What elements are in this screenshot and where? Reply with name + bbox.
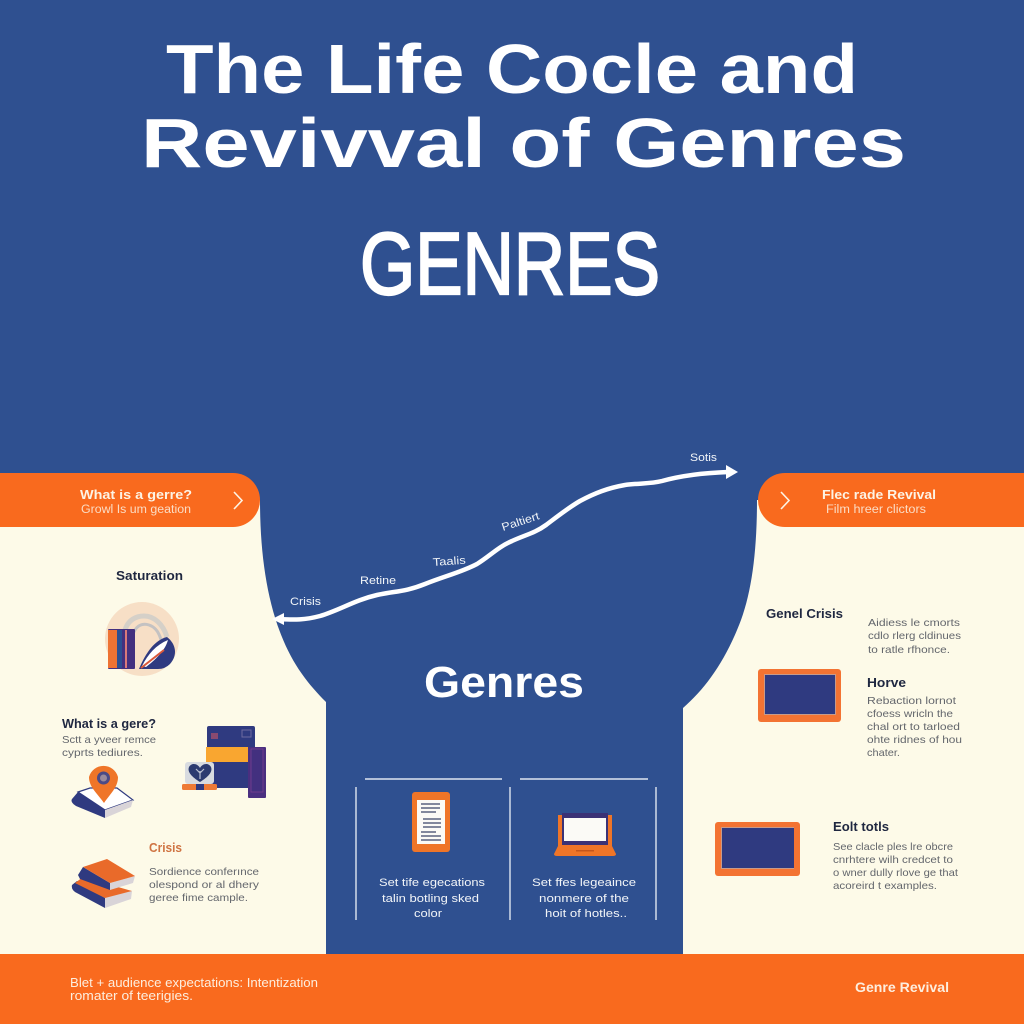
subtitle: GENRES: GENRES bbox=[360, 214, 660, 313]
text block: card two: Set ffes legeaince bbox=[532, 877, 636, 889]
curve: life cycle arrow: Retine bbox=[360, 575, 396, 587]
text block: card one bbox=[379, 877, 486, 920]
text block: audience: to ratle rfhonce. bbox=[868, 644, 950, 656]
right panel background bbox=[683, 500, 1024, 954]
footer text: romater of teerigies. bbox=[70, 988, 193, 1003]
curve: life cycle arrow: Taalis bbox=[432, 555, 467, 569]
text block: Crisis: Sordience conferınce bbox=[149, 866, 259, 878]
text block: What is a genre: cyprts tediures. bbox=[62, 747, 143, 759]
text block: card one: talin botling sked bbox=[382, 893, 479, 905]
text block: Eolt totls bbox=[833, 820, 958, 892]
panel: centre cards bbox=[356, 779, 656, 920]
text block: Horve: cfoess wricln the bbox=[867, 708, 953, 720]
right header banner: Flec rade Revival bbox=[822, 487, 936, 502]
footer text bbox=[70, 975, 318, 1003]
left header banner: What is a gerre? bbox=[80, 487, 192, 502]
title bbox=[141, 30, 906, 182]
text block: Crisis: olespond or al dhery bbox=[149, 879, 260, 891]
text block: Horve bbox=[867, 676, 962, 759]
footer text: Blet + audience expectations: Intentization bbox=[70, 975, 318, 990]
text block: Horve: chater. bbox=[867, 747, 900, 759]
curve: life cycle arrow: Crisis bbox=[290, 596, 322, 608]
text block: Crisis: geree fime cample. bbox=[149, 892, 248, 904]
icon: device stack bbox=[182, 726, 266, 798]
left header banner: Growl Is um geation bbox=[81, 504, 191, 516]
icon: books and shell bbox=[105, 602, 179, 676]
heading: Genres: Genres bbox=[424, 658, 584, 707]
footer band bbox=[0, 954, 1024, 1024]
right header banner: Film hreer clictors bbox=[826, 504, 926, 516]
icon: stacked books bbox=[72, 859, 135, 908]
icon: map pin on book bbox=[72, 766, 133, 818]
text block: Eolt totls: acoreird t examples. bbox=[833, 880, 937, 892]
text block: Eolt totls: See clacle ples lre obcre bbox=[833, 841, 953, 853]
footer label: Genre Revival: Genre Revival bbox=[855, 979, 949, 995]
panel: left bbox=[0, 473, 326, 954]
heading: Genel Crisis: Genel Crisis bbox=[766, 607, 843, 621]
text block: card two: hoit of hotles.. bbox=[545, 908, 627, 920]
left panel background bbox=[0, 500, 326, 954]
text block: Horve: ohte ridnes of hou bbox=[867, 734, 962, 746]
text block: Horve: chal ort to tarloed bbox=[867, 721, 960, 733]
left header banner bbox=[0, 473, 260, 527]
curve: life cycle arrow bbox=[272, 452, 738, 625]
text block: audience bbox=[868, 617, 961, 656]
icon: screen one bbox=[758, 669, 841, 722]
text block: card one: color bbox=[414, 908, 442, 920]
text block: card two: nonmere of the bbox=[539, 893, 629, 905]
text block: Horve: Horve bbox=[867, 676, 906, 690]
right header banner bbox=[758, 473, 1024, 527]
text block: card two bbox=[532, 877, 636, 920]
title: The Life Cocle and bbox=[166, 30, 858, 108]
text block: What is a genre: Sctt a yveer remce bbox=[62, 734, 156, 746]
text block: Eolt totls: cnrhtere wilh credcet to bbox=[833, 854, 953, 866]
icon: laptop bbox=[554, 813, 616, 856]
icon: tablet bbox=[412, 792, 450, 852]
curve: life cycle arrow: Sotis bbox=[690, 452, 718, 464]
text block: card one: Set tife egecations bbox=[379, 877, 486, 889]
text block: audience: cdlo rlerg cldinues bbox=[868, 630, 961, 642]
text block: audience: Aidiess le cmorts bbox=[868, 617, 960, 629]
text block: What is a genre: What is a gere? bbox=[62, 717, 156, 731]
text block: What is a genre bbox=[62, 717, 156, 759]
text block: Eolt totls: o wner dully rlove ge that bbox=[833, 867, 958, 879]
text block: Horve: Rebaction lornot bbox=[867, 695, 956, 707]
icon: screen two bbox=[715, 822, 800, 876]
text block: Eolt totls: Eolt totls bbox=[833, 820, 889, 834]
text block: Crisis bbox=[149, 841, 260, 904]
curve: life cycle arrow: Paltiert bbox=[500, 510, 541, 534]
text block: Crisis: Crisis bbox=[149, 841, 182, 855]
heading: Saturation: Saturation bbox=[116, 569, 183, 583]
title: Revivval of Genres bbox=[141, 104, 906, 182]
panel: right bbox=[683, 473, 1024, 954]
